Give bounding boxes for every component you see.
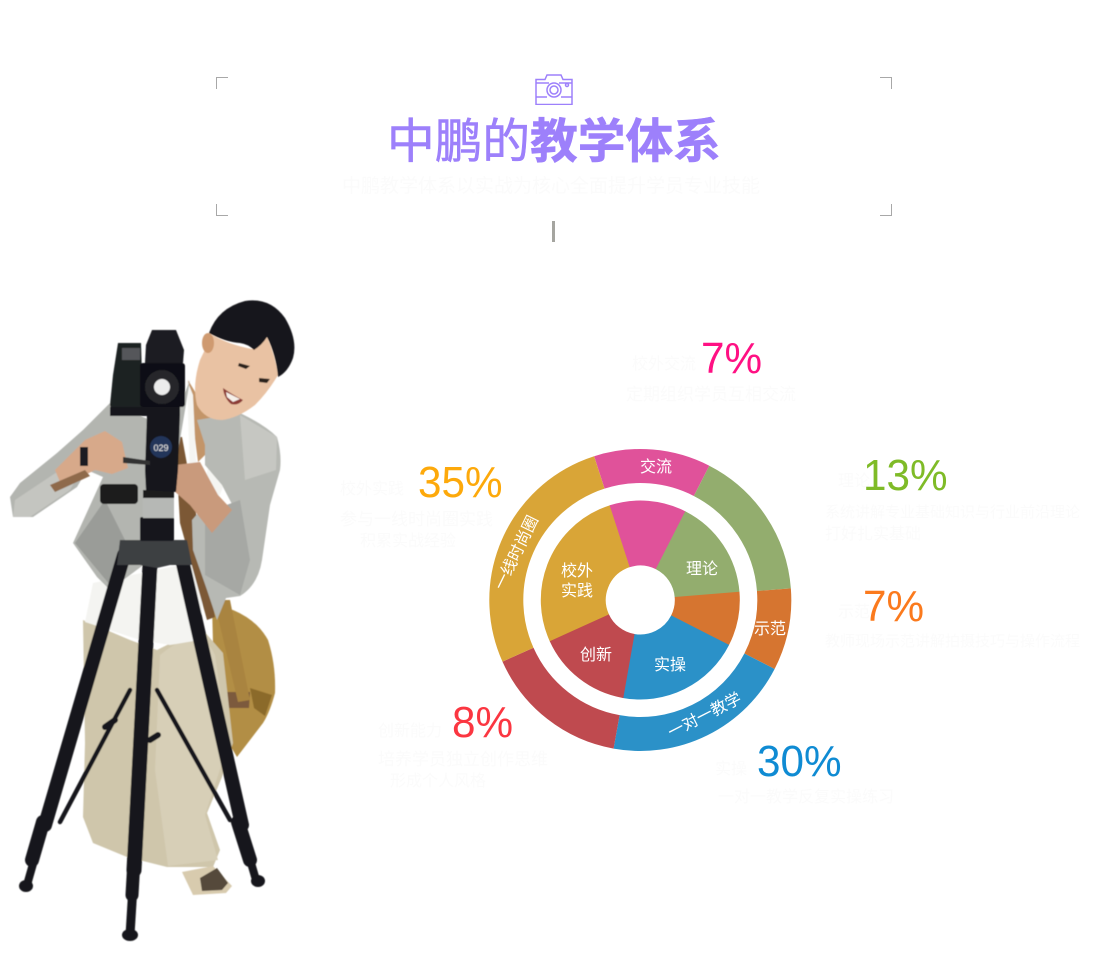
vertical tick [552, 221, 555, 242]
description: 一对一教学反复实操练习 [718, 789, 894, 806]
description: 系统讲解专业基础知识与行业前沿理论 [825, 504, 1080, 521]
description: 参与一线时尚圈实践 [340, 510, 493, 529]
bag [212, 605, 275, 757]
hands [50, 431, 232, 533]
percentage: 35% [418, 458, 503, 507]
label: 创新能力 [378, 723, 442, 740]
callout: theory 13% [825, 451, 1080, 543]
figure artwork [10, 300, 294, 941]
percentage: 13% [863, 451, 948, 500]
chart labels: 一线时尚圈 [491, 513, 542, 593]
label: 校外实践 [340, 481, 404, 498]
tripod head [80, 413, 192, 568]
chart labels [491, 458, 786, 742]
tripod feet [19, 875, 265, 941]
description line 2: 形成个人风格 [390, 773, 486, 790]
tripod head: 029 [153, 443, 169, 453]
label: 示范 [838, 604, 870, 621]
chart labels: 一对一教学 [665, 689, 744, 742]
description line 2: 积累实战经验 [360, 533, 456, 550]
corner bracket top right [880, 77, 892, 89]
chart labels: 创新 [580, 646, 612, 664]
corner bracket bottom left [216, 204, 228, 216]
corner bracket bottom right [880, 204, 892, 216]
corner bracket top left [216, 77, 228, 89]
icon: camera [535, 74, 573, 105]
percentage: 30% [757, 737, 842, 786]
label: 理论 [838, 473, 870, 490]
chart labels: 校外 [561, 562, 593, 580]
description: 定期组织学员互相交流 [626, 385, 796, 404]
subtitle: 中鹏教学体系以实战为核心全面提升学员专业技能 [342, 176, 760, 197]
camera [110, 330, 185, 416]
white shirt [85, 560, 205, 645]
title: 中鹏的教学体系 [387, 116, 721, 169]
tripod legs [27, 555, 256, 935]
callout: practice 35% [340, 458, 503, 550]
percentage: 7% [701, 334, 762, 383]
description line 2: 打好扎实基础 [825, 526, 921, 543]
callout: exchange 7% [626, 334, 796, 404]
percentage: 8% [452, 698, 513, 747]
shoe [182, 866, 232, 895]
chart labels: 理论 [686, 560, 718, 578]
hair [209, 300, 294, 377]
callout: demonstration 7% [825, 582, 1080, 650]
jacket [10, 380, 281, 620]
chart labels: 实践 [561, 582, 593, 600]
callout: innovation 8% [378, 698, 548, 790]
description: 教师现场示范讲解拍摄技巧与操作流程 [825, 633, 1080, 650]
description: 培养学员独立创作思维 [378, 750, 548, 769]
photo: photographer with camera on tripod [10, 300, 296, 942]
chart labels: 交流 [640, 458, 672, 476]
trousers [83, 620, 233, 867]
header frame [216, 74, 892, 242]
chart labels: 示范 [754, 620, 786, 638]
strap [175, 437, 215, 620]
chart labels: 实操 [654, 656, 686, 674]
outer ring [460, 420, 821, 780]
label: 校外交流 [632, 356, 696, 373]
percentage: 7% [863, 582, 924, 631]
label: 实操 [715, 761, 747, 778]
inner pie [550, 510, 731, 690]
callout: hands-on 30% [715, 737, 894, 806]
neck and shirt collar [187, 380, 238, 530]
face [195, 333, 278, 420]
